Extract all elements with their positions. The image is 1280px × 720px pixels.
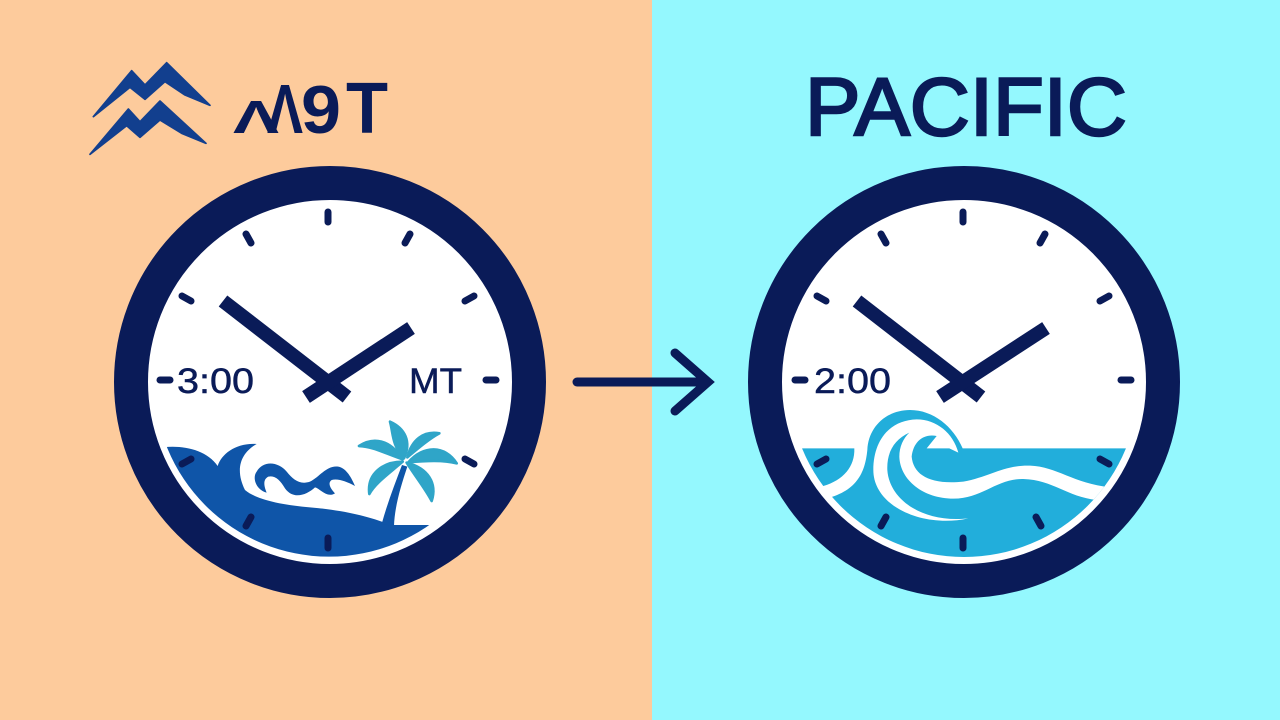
heading: stylised MT wordmark: Λ (233, 91, 279, 143)
clock: pacific time (765, 183, 1163, 600)
wave and island (166, 444, 430, 557)
clock: mountain time (131, 183, 529, 600)
sea main body (832, 410, 1126, 557)
small wave squiggle (255, 464, 355, 495)
heading: stylised MT wordmark: Λ (267, 70, 303, 148)
heading: stylised MT wordmark (233, 69, 388, 149)
panel: right background (652, 0, 1280, 720)
tick marks (160, 212, 496, 548)
logo: mountain mark with MT wordmark (90, 63, 388, 154)
illustration: dark wave and palm tree (166, 420, 458, 557)
arrow: left to right (577, 353, 708, 411)
white wave ribbon (873, 419, 1110, 521)
clock face (131, 183, 529, 581)
heading: PACIFIC: PACIFIC (805, 62, 1127, 153)
tick mark: five o'clock (1036, 517, 1041, 526)
illustration: ocean wave (802, 410, 1126, 557)
clock hands (223, 301, 411, 397)
heading: stylised MT wordmark: 9 (301, 72, 341, 148)
tick marks (795, 212, 1131, 548)
label: 2:00: 2:00 (814, 362, 891, 401)
label: 3:00: 3:00 (177, 362, 254, 401)
palm tree (359, 422, 457, 526)
label: MT: MT (409, 362, 462, 401)
clock hands (857, 301, 1046, 397)
panel: left background (0, 0, 652, 720)
icon: double mountains (90, 63, 210, 154)
heading: stylised MT wordmark: T (346, 69, 388, 149)
sea left piece (802, 448, 854, 486)
clock face (765, 183, 1163, 581)
